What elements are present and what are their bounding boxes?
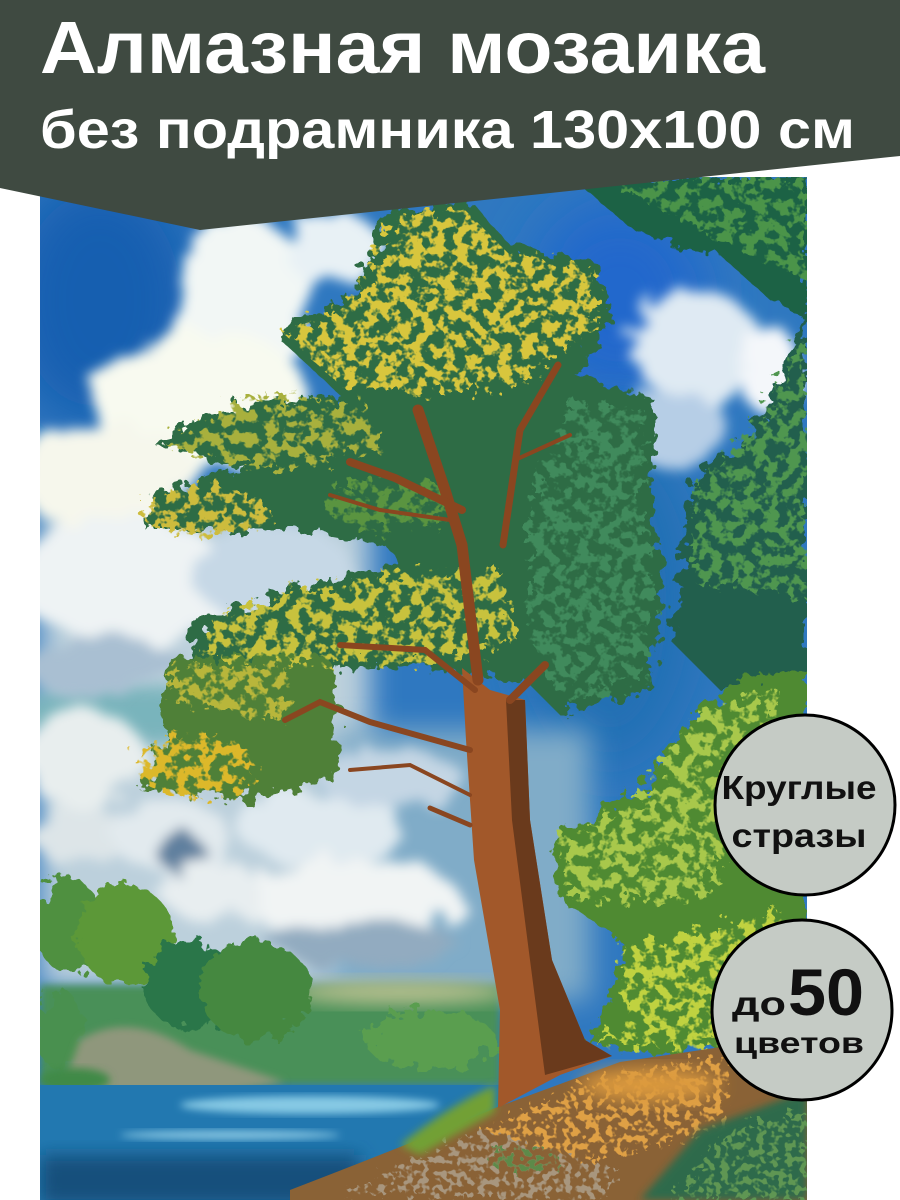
clouds [10,215,800,967]
tree trunk and branches [285,365,612,1108]
header banner [0,0,900,230]
badge: up to 50 colours: цветов [734,1027,864,1060]
subtitle: без подрамника 130х100 см [40,100,855,160]
sky [40,177,807,1105]
river bank [290,1045,807,1200]
badge: round rhinestones [715,715,895,895]
badge: up to 50 colours: до [732,985,786,1022]
badge: round rhinestones: Круглые [722,769,876,806]
badge: up to 50 colours [712,920,892,1100]
far tree line and left trees [35,877,510,1097]
badge: round rhinestones: стразы [732,817,866,854]
painting: tree by the river [0,170,807,1200]
badge: up to 50 colours: 50 [788,955,864,1029]
tree crown [135,200,665,800]
right-side trees [550,177,807,1055]
title: Алмазная мозаика [40,6,766,89]
river [40,1085,500,1200]
